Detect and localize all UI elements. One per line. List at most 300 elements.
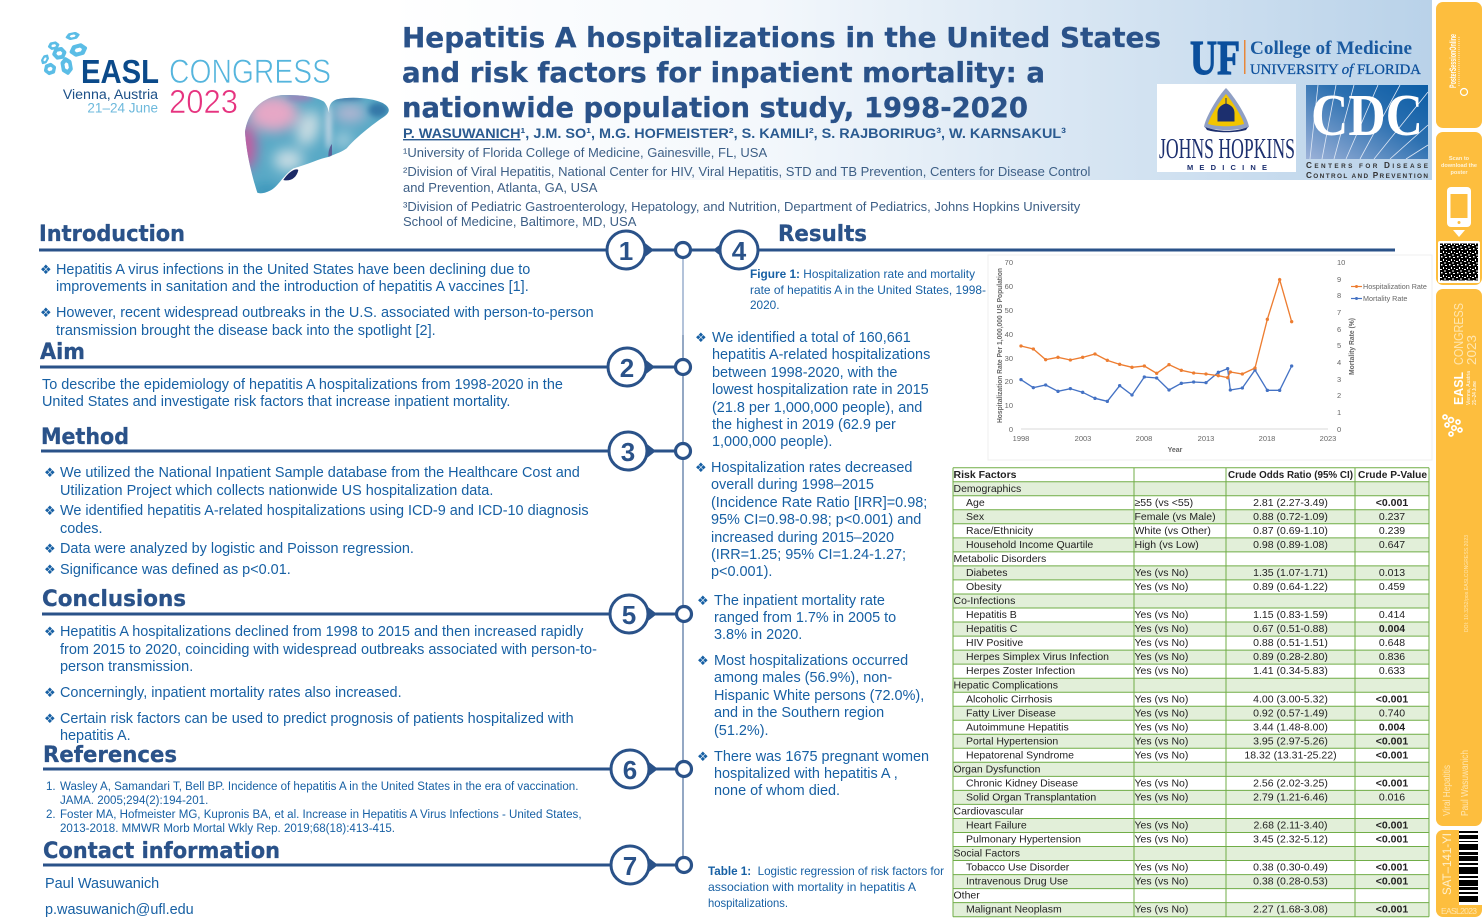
axis titles xyxy=(997,268,1356,454)
right axis labels xyxy=(1337,258,1345,434)
left axis labels: 50 xyxy=(1005,306,1013,315)
table section: cardiovascular: 2.68 (2.11-3.40) xyxy=(1254,820,1327,832)
heading: introduction: Introduction xyxy=(39,222,185,247)
table section: hepatic complications: Yes (vs No) xyxy=(1134,749,1188,761)
line chart: hospitalization and mortality rates xyxy=(988,255,1432,460)
icon: arrow down xyxy=(1453,230,1465,237)
title: nationwide population study, 1998-2020 xyxy=(402,91,1028,124)
right axis labels: 7 xyxy=(1337,308,1341,317)
table section: hepatic complications: Fatty Liver Disease xyxy=(966,707,1056,719)
table section: hepatic complications: 3.44 (1.48-8.00) xyxy=(1253,721,1328,733)
affiliations: ³Division of Pediatric Gastroenterology, Hepatology, and Nutrition, Department of Pediatrics, Johns Hopkins University xyxy=(403,199,1081,214)
x axis labels: 2003 xyxy=(1075,434,1091,443)
table section: co-infections: Yes (vs No) xyxy=(1134,609,1188,621)
logo: University of Florida: College of Medicine xyxy=(1250,38,1412,59)
results bullet: demographics xyxy=(697,653,924,739)
sidebar: scan to download: poster xyxy=(1450,170,1468,176)
conclusions text: ❖ xyxy=(44,686,56,701)
chart legend: Hospitalization Rate xyxy=(1363,282,1427,291)
conclusions text: person transmission. xyxy=(60,659,193,675)
title xyxy=(402,21,1161,124)
table header row: Risk Factors xyxy=(954,469,1017,481)
panel: aim xyxy=(40,340,563,410)
right axis labels: 3 xyxy=(1337,375,1341,384)
table section: co-infections: 0.648 xyxy=(1379,637,1405,649)
conclusions text: Concerningly, inpatient mortality rates also increased. xyxy=(60,685,402,701)
timeline node 6 xyxy=(611,750,649,788)
results bullet: total hospitalizations: ❖ xyxy=(695,331,707,346)
reference list: Foster MA, Hofmeister MG, Kupronis BA, et al. Increase in Hepatitis A Virus Infections - United States, xyxy=(60,809,582,821)
QR code xyxy=(1438,241,1480,283)
sidebar: congress tab xyxy=(1436,289,1482,826)
table section: metabolic disorders: 0.013 xyxy=(1379,567,1405,579)
results bullet: rate changes: increased during 2015–2020 xyxy=(711,530,894,546)
results bullet: pregnancy: There was 1675 pregnant women xyxy=(714,749,929,765)
icon: EASL hexagons xyxy=(41,33,86,74)
results bullet: pregnancy xyxy=(697,749,929,799)
right axis labels: 8 xyxy=(1337,291,1341,300)
sidebar: congress tab: 21–24 June xyxy=(1472,381,1478,405)
method text: We identified hepatitis A-related hospitalizations using ICD-9 and ICD-10 diagnosis xyxy=(60,503,589,519)
method text: ❖ xyxy=(44,466,56,481)
table section: social factors: Social Factors xyxy=(954,848,1020,860)
results bullet: mortality: 3.8% in 2020. xyxy=(714,627,802,643)
table section: co-infections: Yes (vs No) xyxy=(1134,665,1188,677)
results bullet: demographics: Most hospitalizations occurred xyxy=(714,653,908,669)
sidebar: poster ID and barcode: SAT–141-YI xyxy=(1442,833,1454,895)
timeline node 5 xyxy=(610,595,648,633)
logo: CDC: CONTROL AND PREVENTION xyxy=(1306,171,1428,180)
method text: Significance was defined as p<0.01. xyxy=(60,562,291,578)
results bullet: pregnancy: none of whom died. xyxy=(714,783,840,799)
contact email: p.wasuwanich@ufl.edu xyxy=(45,902,194,918)
sidebar: congress tab: Paul Wasuwanich xyxy=(1460,750,1471,816)
axis titles: Hospitalization Rate Per 1,000,000 US Population xyxy=(997,268,1004,423)
x axis labels: 2023 xyxy=(1320,434,1336,443)
table section: social factors: Tobacco Use Disorder xyxy=(966,862,1070,874)
chart legend xyxy=(1351,282,1427,303)
results bullet: rate changes: overall during 1998–2015 xyxy=(711,477,874,493)
affiliations xyxy=(403,145,1090,229)
figure 1 caption: 2020. xyxy=(750,298,780,312)
left axis labels: 60 xyxy=(1005,282,1013,291)
reference list: Wasley A, Samandari T, Bell BP. Incidence of hepatitis A in the United States in the era of vaccination. xyxy=(60,781,578,793)
sidebar: scan to download: download the xyxy=(1441,163,1477,169)
right axis labels: 2 xyxy=(1337,391,1341,400)
left axis labels: 20 xyxy=(1005,377,1013,386)
aim text: United States and investigate risk factors that increase inpatient mortality. xyxy=(42,394,510,410)
heading: references: References xyxy=(43,743,177,768)
table section: other: <0.001 xyxy=(1376,904,1408,916)
results bullet: total hospitalizations: the highest in 2019 (62.9 per xyxy=(712,417,896,433)
logo: EASL Congress 2023 xyxy=(41,33,331,120)
axis titles: Year xyxy=(1168,447,1183,454)
table section: organ dysfunction xyxy=(954,763,1408,804)
table section: demographics: 0.239 xyxy=(1379,525,1405,537)
table section: demographics: Age xyxy=(966,497,985,509)
table section: co-infections: 0.88 (0.51-1.51) xyxy=(1253,637,1328,649)
panel: method xyxy=(41,425,589,578)
table section: demographics: 0.98 (0.89-1.08) xyxy=(1253,539,1328,551)
table section: demographics: 0.647 xyxy=(1379,539,1405,551)
sidebar: congress tab: EASL xyxy=(1451,372,1466,405)
method text xyxy=(44,465,589,578)
results bullet: mortality xyxy=(697,593,896,643)
right axis labels: 4 xyxy=(1337,358,1341,367)
method text: ❖ xyxy=(44,504,56,519)
contact name: Paul Wasuwanich xyxy=(45,876,159,892)
logo: CDC: C ENTERS FOR D ISEASE xyxy=(1306,161,1429,170)
table section: cardiovascular xyxy=(954,806,1408,846)
introduction text: Hepatitis A virus infections in the United States have been declining due to xyxy=(56,262,530,278)
table section: hepatic complications: 4.00 (3.00-5.32) xyxy=(1253,693,1328,705)
table section: organ dysfunction: 0.016 xyxy=(1379,792,1405,804)
year 2023: 2023 xyxy=(169,83,238,120)
reference list: 2. xyxy=(46,809,56,821)
table section: cardiovascular: Yes (vs No) xyxy=(1134,834,1188,846)
title: Hepatitis A hospitalizations in the United States xyxy=(402,21,1161,54)
results bullet: rate changes: 95% CI=0.98-0.98; p<0.001) and xyxy=(711,512,921,528)
aim text xyxy=(42,377,563,410)
table section: hepatic complications: Alcoholic Cirrhosis xyxy=(966,693,1052,705)
table section: metabolic disorders: Yes (vs No) xyxy=(1134,581,1188,593)
conclusions text xyxy=(44,624,597,744)
timeline connectors xyxy=(39,243,1395,872)
results bullet: rate changes: Hospitalization rates decreased xyxy=(711,460,912,476)
conclusions text: ❖ xyxy=(44,625,56,640)
icon: liver illustration xyxy=(245,95,389,194)
results bullet: demographics: ❖ xyxy=(697,654,709,669)
results bullet: demographics: and in the Southern region xyxy=(714,705,884,721)
table section: demographics: 0.237 xyxy=(1379,511,1405,523)
table section: demographics: Demographics xyxy=(954,483,1021,495)
introduction text xyxy=(40,262,594,339)
table 1 caption: hospitalizations. xyxy=(708,896,788,910)
panel: results xyxy=(695,222,986,910)
aim text: To describe the epidemiology of hepatitis A hospitalizations from 1998-2020 in the xyxy=(42,377,563,393)
sidebar: scan to download: Scan to xyxy=(1449,156,1470,162)
table section: hepatic complications: Autoimmune Hepatitis xyxy=(966,721,1069,733)
timeline node 2 xyxy=(608,348,646,386)
heading: aim: Aim xyxy=(40,340,85,365)
table section: demographics: White (vs Other) xyxy=(1134,525,1211,537)
table section: co-infections: 0.89 (0.28-2.80) xyxy=(1253,651,1328,663)
table section: metabolic disorders: Obesity xyxy=(966,581,1002,593)
results bullet: total hospitalizations: 1,000,000 people). xyxy=(712,434,832,450)
conclusions text: hepatitis A. xyxy=(60,728,131,744)
table section: metabolic disorders: Metabolic Disorders xyxy=(954,553,1046,565)
results bullet: mortality: ranged from 1.7% in 2005 to xyxy=(714,610,896,626)
heading: results: Results xyxy=(778,222,867,247)
x axis labels: 2013 xyxy=(1198,434,1214,443)
table section: co-infections: 1.41 (0.34-5.83) xyxy=(1253,665,1328,677)
table section: co-infections: Yes (vs No) xyxy=(1134,637,1188,649)
table section: organ dysfunction: Solid Organ Transplantation xyxy=(966,792,1096,804)
table section: social factors: 0.38 (0.28-0.53) xyxy=(1253,876,1328,888)
affiliations: ¹University of Florida College of Medicine, Gainesville, FL, USA xyxy=(403,145,767,160)
table 1 caption: Table 1: Logistic regression of risk factors for xyxy=(708,864,944,878)
table section: cardiovascular: Cardiovascular xyxy=(954,806,1024,818)
table section: hepatic complications: <0.001 xyxy=(1376,735,1408,747)
logo: University of Florida: UNIVERSITY of FLORIDA xyxy=(1250,62,1421,78)
table section: hepatic complications xyxy=(954,679,1408,761)
timeline node 6: 6 xyxy=(623,755,637,785)
introduction text: transmission brought the disease back into the spotlight [2]. xyxy=(56,323,436,339)
x axis labels: 2008 xyxy=(1136,434,1152,443)
x axis labels xyxy=(1013,434,1336,443)
table section: social factors: Intravenous Drug Use xyxy=(966,876,1068,888)
table section: demographics: 0.87 (0.69-1.10) xyxy=(1253,525,1328,537)
sidebar: congress tab: Vienna, Austria xyxy=(1466,371,1472,405)
conclusions text: ❖ xyxy=(44,712,56,727)
table section: co-infections: 1.15 (0.83-1.59) xyxy=(1253,609,1328,621)
table section: social factors xyxy=(954,848,1408,888)
logo: CDC: CDC xyxy=(1311,82,1423,148)
table section: organ dysfunction: <0.001 xyxy=(1376,778,1408,790)
table section: metabolic disorders xyxy=(954,553,1405,593)
affiliations: and Prevention, Atlanta, GA, USA xyxy=(403,180,598,195)
table section: demographics: <0.001 xyxy=(1376,497,1408,509)
table section: hepatic complications: 0.740 xyxy=(1379,707,1405,719)
timeline node 2: 2 xyxy=(620,353,634,383)
table section: metabolic disorders: Yes (vs No) xyxy=(1134,567,1188,579)
conclusions text: Certain risk factors can be used to predict prognosis of patients hospitalized with xyxy=(60,711,574,727)
table section: other: Other xyxy=(954,890,980,902)
logo: Johns Hopkins Medicine xyxy=(1157,84,1296,172)
left axis labels xyxy=(1005,258,1013,434)
table section: demographics: 0.88 (0.72-1.09) xyxy=(1253,511,1328,523)
table section: hepatic complications: 18.32 (13.31-25.22) xyxy=(1244,749,1337,761)
dates: 21–24 June xyxy=(87,100,158,116)
table section: co-infections: Hepatitis B xyxy=(966,609,1017,621)
panel: conclusions xyxy=(42,587,597,744)
timeline node 3 xyxy=(609,432,647,470)
table section: metabolic disorders: Diabetes xyxy=(966,567,1007,579)
table section: hepatic complications: Portal Hypertension xyxy=(966,735,1058,747)
table section: metabolic disorders: 0.89 (0.64-1.22) xyxy=(1253,581,1328,593)
left axis labels: 10 xyxy=(1005,401,1013,410)
table section: hepatic complications: Yes (vs No) xyxy=(1134,735,1188,747)
table section: hepatic complications: Hepatic Complications xyxy=(954,679,1058,691)
table section: hepatic complications: Yes (vs No) xyxy=(1134,707,1188,719)
table section: other: Yes (vs No) xyxy=(1134,904,1188,916)
timeline node 3: 3 xyxy=(621,437,635,467)
table section: hepatic complications: 0.92 (0.57-1.49) xyxy=(1253,707,1328,719)
table section: social factors: <0.001 xyxy=(1376,862,1408,874)
icon: phone xyxy=(1447,187,1471,227)
sidebar: scan to download xyxy=(1436,132,1482,285)
figure 1 caption xyxy=(750,267,986,312)
left axis labels: 70 xyxy=(1005,258,1013,267)
small timeline junctions xyxy=(676,242,692,872)
results bullet: rate changes: p<0.001). xyxy=(711,564,772,580)
table 1 caption xyxy=(708,864,944,910)
heading: method: Method xyxy=(41,425,129,450)
right axis labels: 5 xyxy=(1337,341,1341,350)
sidebar: poster ID and barcode xyxy=(1436,830,1482,917)
title: and risk factors for inpatient mortality: a xyxy=(402,56,1045,89)
results bullet: pregnancy: hospitalized with hepatitis A , xyxy=(714,766,898,782)
chart legend: Mortality Rate xyxy=(1363,294,1407,303)
affiliations: ²Division of Viral Hepatitis, National Center for HIV, Viral Hepatitis, STD and TB Prevention, Centers for Disease Control xyxy=(403,164,1090,179)
location: Vienna, Austria xyxy=(63,87,158,103)
results bullet: demographics: Hispanic White persons (72.0%), xyxy=(714,688,924,704)
table section: social factors: 0.38 (0.30-0.49) xyxy=(1253,862,1328,874)
table section: organ dysfunction: Chronic Kidney Disease xyxy=(966,778,1078,790)
heading: contact information: Contact information xyxy=(43,839,280,864)
table section: other xyxy=(954,890,1408,916)
results bullet: total hospitalizations: hepatitis A-related hospitalizations xyxy=(712,347,930,363)
table section: hepatic complications: Hepatorenal Syndrome xyxy=(966,749,1074,761)
table section: organ dysfunction: Organ Dysfunction xyxy=(954,763,1041,775)
method text: codes. xyxy=(60,521,103,537)
method text: We utilized the National Inpatient Sample database from the Healthcare Cost and xyxy=(60,465,580,481)
right axis labels: 10 xyxy=(1337,258,1345,267)
table section: co-infections: Hepatitis C xyxy=(966,623,1018,635)
results bullet: total hospitalizations: lowest hospitalization rate in 2015 xyxy=(712,382,929,398)
figure 1 caption: rate of hepatitis A in the United States, 1998- xyxy=(750,283,986,297)
table section: hepatic complications: Yes (vs No) xyxy=(1134,693,1188,705)
sidebar: congress tab: DOI: 10.3252/pos.EASLCONGRESS.2023 xyxy=(1464,535,1470,632)
table section: demographics: Race/Ethnicity xyxy=(966,525,1034,537)
table section: co-infections: 0.414 xyxy=(1379,609,1405,621)
table section: cardiovascular: <0.001 xyxy=(1376,820,1408,832)
table section: other: Malignant Neoplasm xyxy=(966,904,1062,916)
table section: demographics: 2.81 (2.27-3.49) xyxy=(1253,497,1328,509)
table section: organ dysfunction: 2.56 (2.02-3.25) xyxy=(1253,778,1328,790)
sidebar: poster ID and barcode: EASL2023 xyxy=(1441,906,1477,916)
method text: Data were analyzed by logistic and Poisson regression. xyxy=(60,541,414,557)
table section: co-infections: 0.004 xyxy=(1379,623,1405,635)
table section: demographics: Female (vs Male) xyxy=(1134,511,1216,523)
introduction text: However, recent widespread outbreaks in the U.S. associated with person-to-person xyxy=(56,305,594,321)
table section: co-infections: Co-Infections xyxy=(954,595,1015,607)
panel: references xyxy=(43,743,582,835)
table section: hepatic complications: <0.001 xyxy=(1376,749,1408,761)
CONGRESS wordmark: CONGRESS xyxy=(169,53,331,91)
sidebar: congress tab: 2023 xyxy=(1464,335,1479,365)
results bullet: demographics: among males (56.9%), non- xyxy=(714,670,892,686)
table section: co-infections: 0.836 xyxy=(1379,651,1405,663)
table section: social factors: <0.001 xyxy=(1376,876,1408,888)
timeline node 7: 7 xyxy=(623,851,637,881)
heading: conclusions: Conclusions xyxy=(42,587,186,612)
EASL wordmark: EASL xyxy=(81,53,159,90)
timeline node 1: 1 xyxy=(619,236,633,266)
right axis labels: 0 xyxy=(1337,425,1341,434)
table section: other: 2.27 (1.68-3.08) xyxy=(1253,904,1328,916)
conclusions text: Hepatitis A hospitalizations declined from 1998 to 2015 and then increased rapidly xyxy=(60,624,584,640)
table section: social factors: Yes (vs No) xyxy=(1134,876,1188,888)
sidebar: congress tab: CONGRESS xyxy=(1451,303,1466,365)
introduction text: ❖ xyxy=(40,263,52,278)
table section: co-infections: 0.67 (0.51-0.88) xyxy=(1253,623,1328,635)
table section: social factors: Yes (vs No) xyxy=(1134,862,1188,874)
table section: co-infections: Yes (vs No) xyxy=(1134,623,1188,635)
results bullet: pregnancy: ❖ xyxy=(697,750,709,765)
table section: organ dysfunction: Yes (vs No) xyxy=(1134,778,1188,790)
left axis labels: 30 xyxy=(1005,354,1013,363)
results bullet: mortality: The inpatient mortality rate xyxy=(714,593,885,609)
right axis labels: 6 xyxy=(1337,325,1341,334)
right axis labels: 1 xyxy=(1337,408,1341,417)
x axis labels: 2018 xyxy=(1259,434,1275,443)
reference list: JAMA. 2005;294(2):194-201. xyxy=(60,795,208,807)
timeline node 1 xyxy=(607,231,645,269)
table section: organ dysfunction: 2.79 (1.21-6.46) xyxy=(1253,792,1328,804)
results bullet: total hospitalizations: between 1998-2020, with the xyxy=(712,365,897,381)
logo: CDC xyxy=(1306,82,1429,180)
timeline node 4 xyxy=(720,231,758,269)
reference list: 2013-2018. MMWR Morb Mortal Wkly Rep. 2019;68(18):413-415. xyxy=(60,823,395,835)
x axis labels: 1998 xyxy=(1013,434,1029,443)
authors: P. WASUWANICH¹, J.M. SO¹, M.G. HOFMEISTER², S. KAMILI², S. RAJBORIRUG³, W. KARNSAKUL³ xyxy=(403,126,1066,142)
table section: metabolic disorders: 1.35 (1.07-1.71) xyxy=(1253,567,1328,579)
table section: organ dysfunction: Yes (vs No) xyxy=(1134,792,1188,804)
timeline node 7 xyxy=(611,846,649,884)
table section: co-infections: Herpes Simplex Virus Infection xyxy=(966,651,1109,663)
table: logistic regression of risk factors xyxy=(953,468,1429,917)
method text: ❖ xyxy=(44,542,56,557)
table section: hepatic complications: 3.95 (2.97-5.26) xyxy=(1253,735,1328,747)
logo: University of Florida xyxy=(1190,30,1421,85)
table section: cardiovascular: Pulmonary Hypertension xyxy=(966,834,1081,846)
results bullet: total hospitalizations: (21.8 per 1,000,000 people), and xyxy=(712,400,922,416)
figure 1 caption: Figure 1: Hospitalization rate and mortality xyxy=(750,267,975,281)
timeline node 5: 5 xyxy=(622,600,636,630)
panel: introduction xyxy=(39,222,594,339)
results bullet: demographics: (51.2%). xyxy=(714,723,769,739)
table section: co-infections: Herpes Zoster Infection xyxy=(966,665,1075,677)
data lines xyxy=(1021,280,1292,401)
table 1 caption: association with mortality in hepatitis A xyxy=(708,880,916,894)
introduction text: ❖ xyxy=(40,306,52,321)
axis titles: Mortality Rate (%) xyxy=(1349,318,1356,375)
table section: hepatic complications: Yes (vs No) xyxy=(1134,721,1188,733)
affiliations: School of Medicine, Baltimore, MD, USA xyxy=(403,214,637,229)
table section: demographics: ≥55 (vs <55) xyxy=(1134,497,1193,509)
table section: cardiovascular: Heart Failure xyxy=(966,820,1027,832)
panel: contact information xyxy=(43,839,280,918)
left axis labels: 40 xyxy=(1005,330,1013,339)
table section: hepatic complications: 0.004 xyxy=(1379,721,1405,733)
sidebar: PosterSessionOnline tab xyxy=(1436,2,1482,128)
logo: University of Florida: UF xyxy=(1190,30,1240,85)
table header row: Crude P-Value xyxy=(1358,469,1427,481)
table section: cardiovascular: Yes (vs No) xyxy=(1134,820,1188,832)
left axis labels: 0 xyxy=(1009,425,1013,434)
barcode xyxy=(1459,830,1482,905)
conclusions text: from 2015 to 2020, coinciding with widespread outbreaks associated with person-to- xyxy=(60,642,597,658)
table section: cardiovascular: <0.001 xyxy=(1376,834,1408,846)
table section: cardiovascular: 3.45 (2.32-5.12) xyxy=(1253,834,1328,846)
results bullet: total hospitalizations xyxy=(695,330,930,450)
header gradient band xyxy=(390,0,1432,180)
method text: Utilization Project which collects nationwide US hospitalization data. xyxy=(60,483,493,499)
reference list xyxy=(46,781,582,835)
results bullet: rate changes: (Incidence Rate Ratio [IRR]=0.98; xyxy=(711,495,927,511)
table section: demographics: Household Income Quartile xyxy=(966,539,1093,551)
results bullet: total hospitalizations: We identified a total of 160,661 xyxy=(712,330,911,346)
table section: demographics: Sex xyxy=(966,511,985,523)
results bullet: rate changes: ❖ xyxy=(695,461,707,476)
reference list: 1. xyxy=(46,781,56,793)
method text: ❖ xyxy=(44,563,56,578)
sidebar: congress tab: Viral Hepatitis xyxy=(1442,765,1453,816)
table section: co-infections: Yes (vs No) xyxy=(1134,651,1188,663)
logo: Johns Hopkins Medicine: MEDICINE xyxy=(1187,163,1267,172)
results bullet: rate changes: (IRR=1.25; 95% CI=1.24-1.27; xyxy=(711,547,906,563)
